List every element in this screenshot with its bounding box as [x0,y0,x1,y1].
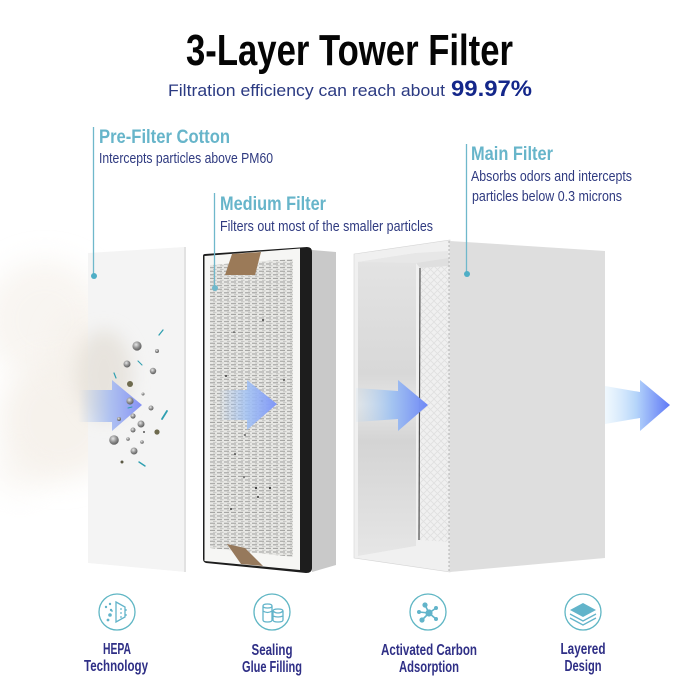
open side frame [354,240,450,572]
subtitle [168,76,532,101]
icon: sealing glue filling [254,594,290,630]
callout: medium filter [212,193,433,291]
label: HEPA technology: Technology [84,658,148,675]
callout: pre-filter cotton [91,127,273,279]
label: sealing glue filling [242,642,302,676]
arrow: into main filter [356,380,428,431]
label: activated carbon adsorption: Activated Carbon [381,642,477,659]
label: HEPA technology: HEPA [103,641,131,658]
front face [450,241,605,572]
panel: main filter box [354,240,605,572]
dust specks [225,319,285,510]
icon: layered design [565,594,601,630]
inner wall [358,253,416,556]
title: 3-Layer Tower Filter [186,26,513,75]
label: sealing glue filling: Glue Filling [242,659,302,676]
callout: medium filter: Medium Filter [220,194,327,215]
inner filter [420,266,449,542]
particles [109,330,167,466]
label: layered design [560,641,606,675]
callout: medium filter: Filters out most of the smaller particles [220,219,433,235]
black frame [203,247,312,573]
icon: activated carbon [410,594,446,630]
callout: main filter: particles below 0.3 microns [472,189,622,205]
subtitle: Filtration efficiency can reach about [168,81,445,100]
white inner frame [204,248,300,570]
callout: main filter: Main Filter [471,144,554,165]
inner top [358,251,448,263]
label: layered design: Layered [560,641,606,658]
filter edge [419,268,420,540]
label: activated carbon adsorption: Adsorption [399,659,459,676]
subtitle: 99.97% [451,76,532,101]
pleated mesh [210,259,293,557]
callout: main filter [464,144,632,277]
filter holder [416,258,449,268]
brown seal tab bottom [227,544,263,566]
smoke on sheet [76,330,132,420]
callout: main filter: Absorbs odors and intercepts [471,169,632,185]
label: activated carbon adsorption [381,642,477,676]
arrow: through medium filter [218,380,277,430]
arrow: clean air output [605,380,670,431]
inner bottom [358,546,448,568]
grey side of medium filter [312,250,336,572]
arrow: through pre-filter [78,380,142,431]
label: layered design: Design [564,658,602,675]
brown seal tab top [225,252,261,275]
stitched edge [448,241,450,572]
smoke cloud [0,260,120,495]
callout: pre-filter cotton: Pre-Filter Cotton [99,127,230,148]
icon: HEPA technology [99,594,135,630]
panel: pre-filter cotton sheet [76,247,186,572]
panel: medium filter [203,247,336,573]
label: sealing glue filling: Sealing [252,642,292,659]
label: HEPA technology [84,641,148,675]
callout: pre-filter cotton: Intercepts particles above PM60 [99,151,273,167]
